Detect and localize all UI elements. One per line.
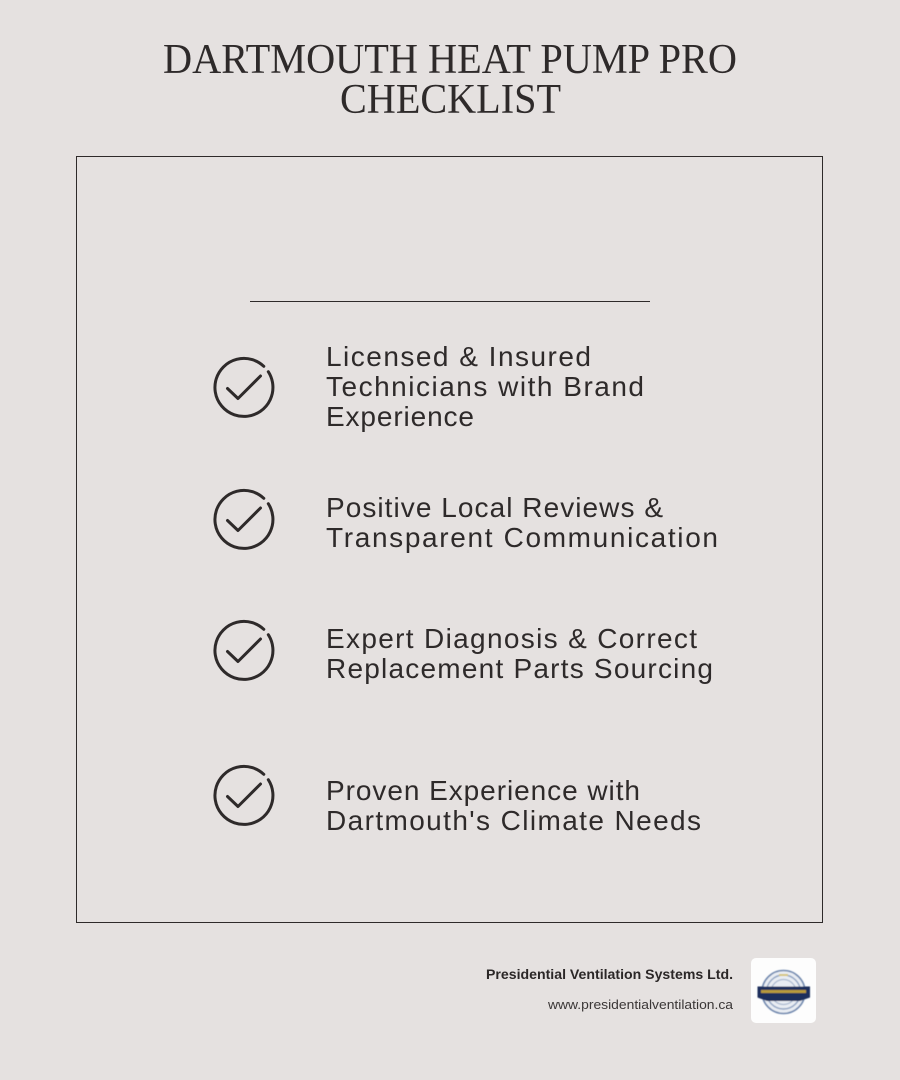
title: DARTMOUTH HEAT PUMP PRO bbox=[163, 37, 737, 83]
title bbox=[163, 37, 737, 123]
icon: check circle bbox=[215, 358, 273, 416]
item text: expert diagnosis bbox=[326, 623, 713, 684]
item text: positive reviews: Positive Local Reviews & bbox=[326, 492, 663, 523]
company details: Presidential Ventilation Systems Ltd. bbox=[486, 967, 733, 982]
checklist item: positive reviews bbox=[215, 490, 718, 553]
item text: positive reviews bbox=[326, 492, 718, 553]
item text: licensed and insured bbox=[326, 341, 644, 432]
panel: checklist bbox=[76, 156, 822, 922]
icon: check circle bbox=[215, 490, 273, 548]
checklist item: proven experience bbox=[215, 766, 701, 836]
item text: proven experience: Dartmouth's Climate Needs bbox=[326, 805, 701, 836]
item text: proven experience: Proven Experience with bbox=[326, 775, 640, 806]
title: CHECKLIST bbox=[340, 77, 561, 123]
company details bbox=[486, 967, 734, 1012]
icon: check circle bbox=[215, 766, 273, 824]
icon: check circle bbox=[215, 621, 273, 679]
item text: expert diagnosis: Replacement Parts Sourcing bbox=[326, 653, 713, 684]
item text: licensed and insured: Licensed & Insured bbox=[326, 341, 591, 372]
item text: licensed and insured: Experience bbox=[326, 401, 474, 432]
item text: licensed and insured: Technicians with Brand bbox=[326, 371, 644, 402]
company details: www.presidentialventilation.ca bbox=[547, 997, 734, 1012]
item text: positive reviews: Transparent Communication bbox=[326, 522, 718, 553]
checklist item: licensed and insured bbox=[215, 341, 644, 432]
item text: proven experience bbox=[326, 775, 701, 836]
checklist item: expert diagnosis bbox=[215, 621, 713, 684]
icon: company logo bbox=[751, 958, 816, 1023]
item text: expert diagnosis: Expert Diagnosis & Correct bbox=[326, 623, 697, 654]
